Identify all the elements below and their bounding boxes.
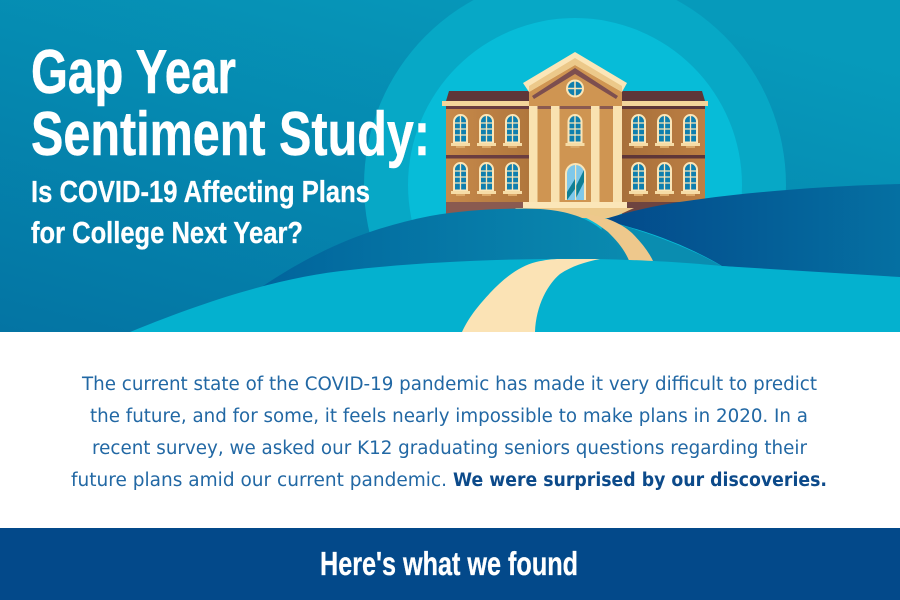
lower path: [462, 259, 600, 332]
dark right hill: [602, 184, 900, 280]
illustration: school building: [442, 52, 708, 218]
front hill: [130, 259, 900, 332]
subtitle: for College Next Year?: [31, 215, 303, 250]
title: Sentiment Study:: [31, 100, 430, 169]
footer heading: Here's what we found: [320, 545, 578, 582]
intro paragraph: future plans amid our current pandemic.: [71, 470, 447, 491]
intro paragraph: recent survey, we asked our K12 graduating seniors questions regarding their: [92, 438, 807, 459]
upper path: [586, 218, 653, 261]
central portico: [523, 52, 627, 202]
subtitle: Is COVID-19 Affecting Plans: [31, 174, 370, 209]
hero banner: [0, 0, 900, 332]
door: [565, 163, 586, 200]
outer halo circle: [364, 0, 786, 266]
intro paragraph: [71, 374, 827, 491]
left wing: [442, 91, 529, 218]
middle hill: [264, 208, 602, 286]
title: Gap Year: [31, 38, 236, 107]
windows: [451, 114, 700, 196]
title: [31, 38, 430, 169]
footer banner: [0, 528, 900, 600]
steps: [515, 202, 634, 218]
intro paragraph: The current state of the COVID-19 pandemic has made it very difficult to predict: [81, 374, 817, 395]
round window: [566, 80, 584, 98]
right wing: [622, 91, 708, 218]
columns: [529, 106, 622, 202]
subtitle: [31, 174, 370, 250]
inner halo circle: [408, 18, 742, 266]
teal hill behind path: [602, 225, 721, 266]
intro paragraph: We were surprised by our discoveries.: [453, 470, 827, 491]
intro paragraph: the future, and for some, it feels nearly impossible to make plans in 2020. In a: [90, 406, 808, 427]
